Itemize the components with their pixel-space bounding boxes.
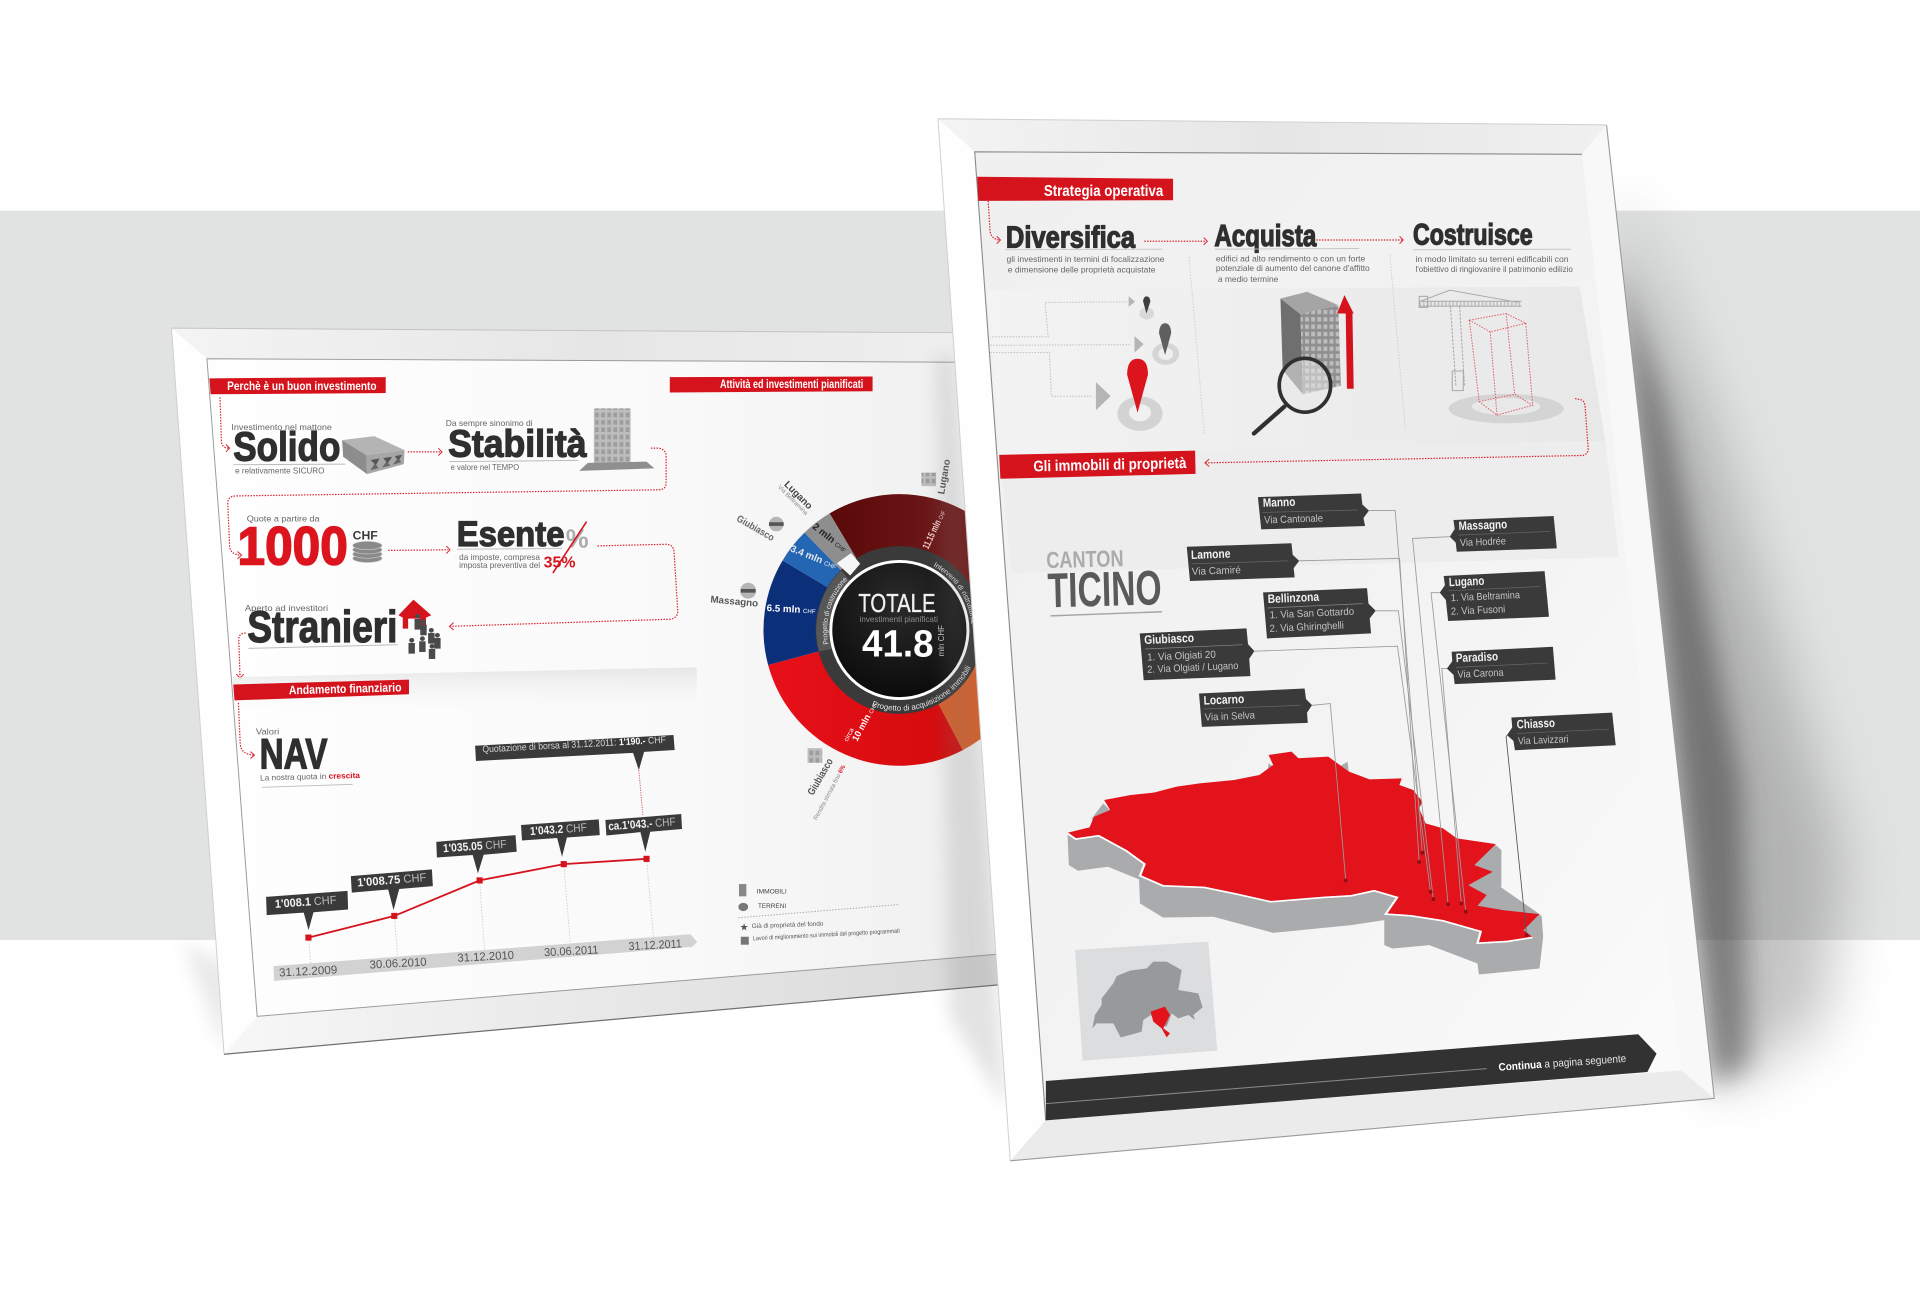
heading: immobili di proprieta: Gli immobili di proprietà <box>1033 455 1187 475</box>
text block: Esente <box>457 514 576 572</box>
center totals: 41.8 <box>862 623 934 665</box>
segment values: 2 mln CHF <box>810 521 849 555</box>
chart: NAV line <box>266 735 697 981</box>
label: Locarno <box>1199 689 1312 727</box>
white wedge <box>837 553 860 576</box>
dotted connectors <box>990 302 1131 396</box>
text block: Costruisce: l'obiettivo di ringiovanire il patrimonio edilizio <box>1416 265 1573 274</box>
callout: value 3: 1'035.05 CHF <box>443 838 507 855</box>
callout: value 1 <box>266 891 348 930</box>
dotted guides <box>309 770 654 967</box>
text block: Stabilita: Stabilità <box>448 424 587 466</box>
label: Massagno: Via Hodrée <box>1460 536 1506 549</box>
arrow: Esente to Stranieri <box>449 544 678 630</box>
text block: 1000 CHF: Quote a partire da <box>247 515 320 524</box>
label: Bellinzona: Bellinzona <box>1267 590 1320 606</box>
text block: 1000 CHF: 1000 <box>238 516 348 576</box>
label: Bellinzona <box>1263 588 1376 638</box>
label: Lamone: Via Camiré <box>1192 565 1241 578</box>
segment values: circa <box>843 727 856 743</box>
chart: investment donut <box>710 459 980 821</box>
text block: Diversifica <box>1005 220 1165 274</box>
heading: strategia operativa: Strategia operativa <box>1044 183 1164 200</box>
left poster paper <box>207 359 1016 1016</box>
axis dates: 31.12.2011 <box>628 937 682 953</box>
segment: massagno <box>764 560 828 665</box>
text block: Stranieri: Stranieri <box>247 603 397 652</box>
line series <box>308 859 647 938</box>
segment: giubiasco 10 <box>768 651 963 766</box>
segment values <box>766 509 949 743</box>
text block: Acquista <box>1214 219 1370 284</box>
callout: value 4 <box>521 819 600 857</box>
callout: borsa: Quotazione di borsa al 31.12.2011: 1'190.- CHF <box>482 735 666 755</box>
ring labels: Progetto di costruzione <box>822 578 847 644</box>
text block: Stabilita: Da sempre sinonimo di <box>446 419 533 428</box>
location labels: Lugano <box>782 479 814 512</box>
background band <box>0 211 1920 940</box>
text block: Esente: 35% <box>544 555 576 572</box>
text block: Diversifica: e dimensione delle proprietà acquistate <box>1008 265 1156 274</box>
text block: NAV <box>256 728 361 787</box>
heading: strategia operativa <box>977 177 1173 201</box>
arrow: Stranieri to Andamento <box>236 633 246 678</box>
arrow: Stabilita to 1000 <box>228 448 666 559</box>
label: Manno: Via Cantonale <box>1264 513 1323 526</box>
gray shading band <box>233 667 697 713</box>
map side extrusion <box>1067 762 1543 975</box>
text block: Acquista: a medio termine <box>1218 275 1279 284</box>
arrow: to NAV <box>238 703 254 758</box>
footer bar <box>1046 1034 1657 1120</box>
heading: andamento finanziario <box>233 680 409 700</box>
label: Lugano: 1. Via Beltramina <box>1451 590 1520 604</box>
legend: TERRENI <box>758 903 786 910</box>
center totals <box>858 590 946 665</box>
segment values: 11.15 mln CHF <box>921 509 949 551</box>
location labels: Lugano <box>936 459 953 495</box>
arrow: to Diversifica <box>988 201 1000 244</box>
segment: lugano 11.15 <box>830 494 1035 630</box>
callout: value 5: ca.1'043.- CHF <box>608 816 676 833</box>
axis dates <box>279 937 682 980</box>
label: Chiasso: Via Lavizzari <box>1518 734 1569 747</box>
map top surface <box>1067 752 1539 942</box>
map: Ticino 3D <box>1067 752 1543 975</box>
light band under section heading <box>1000 441 1619 573</box>
text block: Acquista: Acquista <box>1214 219 1317 253</box>
label: Lamone <box>1187 543 1299 581</box>
left poster inner edge <box>207 359 1016 1016</box>
text block: Stranieri: Aperto ad investitori <box>245 604 328 613</box>
legend: Già di proprietà del fondo <box>752 921 824 930</box>
location labels: Rendita stimata fino 6% <box>812 764 847 821</box>
ring segment: costruzione <box>816 570 861 651</box>
axis dates: 30.06.2011 <box>544 943 599 959</box>
location labels: Giubiasco <box>734 513 776 544</box>
axis dates: 31.12.2010 <box>457 949 515 965</box>
text block: NAV: NAV <box>260 730 328 778</box>
label: Locarno: Locarno <box>1203 692 1245 708</box>
label: Giubiasco: Giubiasco <box>1144 631 1194 647</box>
axis dates: 30.06.2010 <box>369 956 427 972</box>
icon: house and investors <box>398 600 441 659</box>
arrow: Diversifica to Acquista <box>1144 238 1207 245</box>
label: Paradiso <box>1447 647 1556 684</box>
map: Switzerland inset <box>1075 942 1217 1061</box>
location labels: Massagno <box>710 594 759 610</box>
location labels: Giubiasco <box>806 757 836 797</box>
callout: value 2: 1'008.75 CHF <box>357 871 427 890</box>
right poster frame <box>938 119 1714 1161</box>
icon: diversify pins <box>990 296 1179 431</box>
text block: Acquista: edifici ad alto rendimento o con un forte <box>1216 254 1366 263</box>
callout: value 2 <box>351 869 433 910</box>
icon: coins <box>353 541 382 563</box>
label: Manno <box>1258 493 1369 529</box>
text block: Diversifica: Diversifica <box>1006 220 1136 254</box>
center totals: TOTALE <box>858 590 936 618</box>
label: Giubiasco: 2. Via Olgiati / Lugano <box>1147 661 1239 676</box>
text block: Esente: Esente <box>457 514 564 554</box>
segment: gray 2 <box>804 513 857 570</box>
arrow: Costruisce to immobili <box>1205 399 1588 467</box>
icon: bricks <box>342 436 405 474</box>
label: Bellinzona: 2. Via Ghiringhelli <box>1269 621 1344 635</box>
callout: value 1: 1'008.1 CHF <box>274 894 337 911</box>
segment values: 3.4 mln CHF <box>789 544 838 572</box>
callout: borsa <box>475 735 675 770</box>
text block: NAV: La nostra quota in crescita <box>260 771 361 783</box>
text block: NAV: Valori <box>256 728 279 737</box>
gray zone: strategy icons <box>987 287 1605 456</box>
label: Chiasso <box>1507 713 1616 750</box>
callout: value 3 <box>436 835 517 873</box>
map: location pins <box>1344 851 1529 937</box>
shadow on left poster from right poster <box>937 355 1007 1108</box>
arrow: Solido to Stabilita <box>408 448 442 456</box>
heading: andamento finanziario: Andamento finanziario <box>289 680 402 697</box>
title: Canton Ticino: CANTON <box>1046 545 1124 573</box>
heading: attivita <box>670 377 873 392</box>
legend: Lavori di miglioramento sui immobili del progetto programmati <box>753 928 900 942</box>
ring labels: Progetto di acquisizione immobili <box>872 665 971 712</box>
icon: percent slash: % <box>566 525 589 553</box>
panel: left poster <box>171 328 998 1055</box>
right poster paper <box>975 152 1681 1120</box>
title: Canton Ticino <box>1046 545 1162 618</box>
segment: blue 3.4 <box>783 533 841 587</box>
label: Manno: Manno <box>1263 495 1296 510</box>
ring labels: Interventi di ristrutturazione <box>934 562 972 624</box>
heading: immobili di proprieta <box>999 451 1196 479</box>
arrow: 1000 to Esente <box>388 546 450 553</box>
center totals: investimenti pianificati <box>860 615 938 624</box>
heading: perche: Perchè è un buon investimento <box>227 379 377 393</box>
label: Bellinzona: 1. Via San Gottardo <box>1269 607 1355 621</box>
label: Lugano <box>1440 571 1549 621</box>
text block: Stabilita: e valore nel TEMPO <box>451 463 519 472</box>
map: leader lines <box>1254 511 1527 935</box>
map white edge <box>1067 833 1533 943</box>
segment values: 10 mln CHF <box>850 700 879 743</box>
text block: Esente: imposta preventiva del <box>459 561 540 570</box>
panel: right poster <box>938 119 1714 1161</box>
center totals: mln CHF <box>937 625 946 656</box>
callout: value 5 <box>605 814 682 852</box>
label: Paradiso: Via Carona <box>1457 668 1504 681</box>
text block: Costruisce <box>1413 218 1573 274</box>
label: Lamone: Lamone <box>1191 547 1231 562</box>
label: Giubiasco: 1. Via Olgiati 20 <box>1147 650 1216 664</box>
location labels <box>710 459 953 821</box>
heading: attivita: Attività ed investimenti pianificati <box>720 378 863 391</box>
data points <box>305 856 650 941</box>
inner ring <box>816 546 983 714</box>
text block: Diversifica: gli investimenti in termini di focalizzazione <box>1007 255 1165 264</box>
text block: Costruisce: in modo limitato su terreni edificabili con <box>1416 255 1569 264</box>
text block: 1000 CHF: CHF <box>353 528 378 542</box>
footer bar: Continua a pagina seguente <box>1498 1053 1627 1074</box>
icon: tower <box>579 408 654 471</box>
segment: orange <box>938 630 1035 750</box>
label: Massagno: Massagno <box>1458 517 1507 533</box>
text block: Costruisce: Costruisce <box>1413 218 1533 251</box>
center disc <box>831 561 968 699</box>
label: Massagno <box>1450 516 1557 552</box>
icon: building with magnifier <box>1254 292 1354 433</box>
callout: value 4: 1'043.2 CHF <box>530 821 587 838</box>
label: Chiasso: Chiasso <box>1516 716 1555 732</box>
icon: percent slash <box>553 522 589 573</box>
text block: Solido: e relativamente SICURO <box>235 466 324 475</box>
icon: crane and wire building <box>1419 290 1564 423</box>
text block: Esente: da imposte, compresa <box>459 553 541 562</box>
arrow: Acquista to Costruisce <box>1316 236 1403 244</box>
icons: land and buildings <box>740 473 936 763</box>
text block: Acquista: potenziale di aumento del canone d'affitto <box>1216 264 1370 273</box>
text block: Solido: Solido <box>233 423 340 469</box>
legend: IMMOBILI <box>757 888 787 895</box>
poster shadows <box>184 184 1843 1092</box>
heading: perche <box>209 377 386 394</box>
segment values: 6.5 mln CHF <box>766 603 816 617</box>
arrow: start to Solido <box>220 397 230 452</box>
title: Canton Ticino: TICINO <box>1047 561 1162 618</box>
label: Giubiasco <box>1140 628 1254 680</box>
legend <box>738 884 900 945</box>
axis dates: 31.12.2009 <box>279 963 338 980</box>
location labels: Via Beltramina <box>776 484 810 517</box>
ring labels <box>822 562 972 712</box>
left poster frame <box>171 328 1016 1054</box>
legend: ★ <box>740 923 749 934</box>
label: Paradiso: Paradiso <box>1455 649 1498 665</box>
right poster inner edge <box>975 152 1582 1120</box>
date axis band <box>273 934 697 981</box>
label: Locarno: Via in Selva <box>1205 710 1255 724</box>
text block: Solido: Investimento nel mattone <box>231 423 332 432</box>
label: Lugano: 2. Via Fusoni <box>1451 604 1505 618</box>
column separators <box>1189 255 1405 435</box>
label: Lugano: Lugano <box>1448 574 1485 589</box>
